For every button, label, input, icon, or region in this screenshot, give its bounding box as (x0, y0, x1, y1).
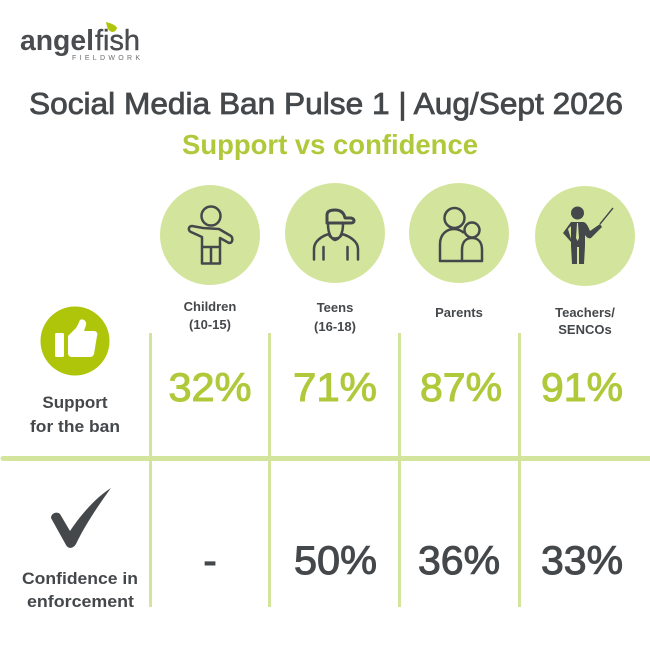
column labels: (16-18) (314, 319, 356, 334)
confidence values: 50% (294, 539, 377, 583)
title: Social Media Ban Pulse 1 | Aug/Sept 2026 (29, 86, 623, 121)
confidence values (203, 539, 623, 583)
column labels: Teachers/ (555, 305, 615, 320)
column labels: Parents (435, 305, 483, 320)
logo: angelfish fieldwork: fish (95, 25, 140, 57)
support values: 87% (420, 366, 502, 410)
support values: 91% (541, 366, 623, 410)
logo: angelfish fieldwork: FIELDWORK (72, 55, 140, 62)
column labels (184, 299, 615, 337)
row label: confidence in enforcement: Confidence in (22, 569, 138, 588)
subtitle: Support vs confidence (182, 129, 478, 160)
logo: angelfish fieldwork: angel (20, 25, 94, 57)
support values: 71% (293, 366, 377, 410)
confidence values: 33% (541, 539, 623, 583)
icon: check mark (51, 488, 111, 548)
row label: support for the ban: Support (42, 393, 108, 412)
support values: 32% (168, 366, 252, 410)
row label: support for the ban: for the ban (30, 417, 120, 436)
support values (168, 366, 623, 410)
icon: parents (409, 183, 509, 283)
icon: thumbs up (40, 306, 110, 376)
grid lines (3, 333, 650, 607)
column labels: Teens (317, 300, 353, 315)
row label: confidence in enforcement (22, 569, 138, 611)
confidence values: - (203, 539, 217, 583)
logo: angelfish fieldwork (20, 22, 140, 62)
confidence values: 36% (418, 539, 500, 583)
icon: children (160, 185, 260, 285)
column labels: (10-15) (189, 317, 231, 332)
row label: confidence in enforcement: enforcement (27, 592, 134, 611)
icon: teens (285, 183, 385, 283)
row label: support for the ban (30, 393, 120, 436)
column labels: SENCOs (558, 322, 612, 337)
column labels: Children (184, 299, 236, 314)
icon: teachers (535, 186, 635, 286)
